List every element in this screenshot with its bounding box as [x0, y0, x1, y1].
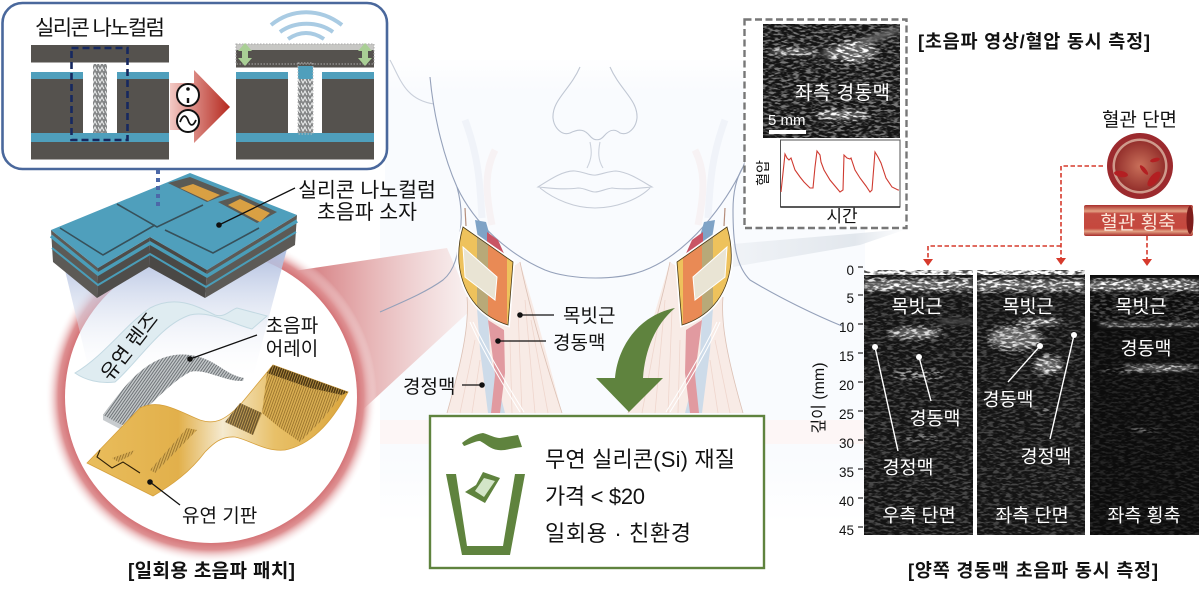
ultrasound image: 좌측 경동맥: [795, 82, 890, 104]
chip: silicon nanocolumn device: [51, 173, 297, 298]
label: flexible substrate: 유연 기판: [182, 505, 257, 527]
ultrasound array: [103, 355, 244, 430]
heading: simultaneous ultrasound and blood pressure: [초음파 영상/혈압 동시 측정]: [918, 31, 1150, 52]
muscle outer edge: [447, 262, 562, 413]
depth axis: 35: [839, 465, 854, 480]
ultrasound panel: left longitudinal: [1090, 275, 1199, 535]
ultrasound panel: left longitudinal: 경동맥: [1120, 338, 1172, 359]
face and neck pale background: [380, 58, 865, 523]
icon: ultrasound waves: [271, 12, 342, 39]
muscle fibers: [460, 300, 548, 413]
feature text: [545, 447, 735, 546]
muscle: [447, 262, 562, 413]
pointer: jugular: 경정맥: [1020, 446, 1072, 467]
panel title: 실리콘 나노컬럼: [35, 17, 165, 40]
jugular vein: [477, 308, 505, 413]
icon: vessel longitudinal tube: [1084, 205, 1194, 236]
label: silicon nanocolumn ultrasound element: [216, 179, 436, 228]
ultrasound panel: right cross-section: 우측 단면: [882, 505, 956, 526]
heading: disposable ultrasound patch: [일회용 초음파 패치]: [128, 560, 295, 582]
projection beam from chip (blue): [63, 245, 288, 377]
feature text: 일회용 · 친환경: [545, 521, 691, 546]
facial outline: [380, 60, 842, 326]
neck label: muscle: 목빗근: [563, 305, 615, 327]
cross-section vibrating state: [236, 43, 374, 160]
ultrasound image: [763, 24, 900, 138]
pointer: carotid: 경동맥: [982, 389, 1034, 410]
pointer: carotid: [982, 343, 1043, 410]
panel: glow circle with patch exploded view: [45, 231, 377, 563]
label: ultrasound array: [187, 315, 318, 362]
depth axis: 0: [846, 263, 854, 278]
ultrasound panel: left longitudinal: 목빗근: [1115, 296, 1167, 317]
icon: hand and disposal bin: [446, 433, 525, 555]
blood pressure chart: 혈압: [755, 160, 771, 186]
arrow: voltage applied: [170, 70, 230, 143]
label: ultrasound array: 초음파: [266, 315, 318, 337]
panel: ultrasound image and blood pressure: [744, 20, 906, 228]
ultrasound panel: left cross-section: 목빗근: [1002, 296, 1054, 317]
neck label: jugular vein: 경정맥: [403, 376, 455, 398]
label: ultrasound array: 어레이: [266, 338, 318, 360]
panel: silicon nanocolumn working principle: [2, 3, 387, 169]
depth axis: 20: [839, 378, 854, 393]
projection beam to neck (red): [287, 248, 473, 415]
lens label: 유연 렌즈: [96, 308, 163, 385]
cross-section rest state: [31, 45, 169, 160]
ultrasound image: 5 mm: [768, 112, 806, 129]
depth axis: 25: [839, 407, 854, 422]
neck label: carotid artery: [495, 332, 605, 354]
feature text: 가격 < $20: [545, 484, 645, 509]
arrows: dashed red connectors: [923, 166, 1152, 266]
ultrasound panel: left cross-section: 좌측 단면: [995, 505, 1069, 526]
pointer: carotid: 경동맥: [909, 408, 961, 429]
icon: vessel longitudinal tube: 혈관 횡축: [1100, 212, 1176, 234]
label: vessel cross-section: 혈관 단면: [1102, 109, 1177, 131]
neck label: muscle: [517, 305, 615, 327]
depth axis: 10: [839, 320, 854, 335]
pointer: jugular: 경정맥: [882, 457, 934, 478]
dashed connector from panel to chip: [156, 170, 160, 207]
depth axis: 15: [839, 349, 854, 364]
label: flexible substrate: [147, 479, 257, 527]
pointer: jugular: [1020, 332, 1077, 467]
neck label: carotid artery: 경동맥: [553, 332, 605, 354]
depth axis: 5: [846, 291, 854, 306]
depth axis: 깊이 (mm): [810, 362, 828, 434]
carotid artery: [488, 320, 505, 413]
ultrasound panel: left longitudinal: 좌측 횡축: [1107, 505, 1181, 526]
icon: vessel cross-section: [1107, 133, 1173, 199]
upper vessel stubs: [465, 208, 506, 258]
flexible substrate: [87, 365, 348, 496]
faint facial vessels: [465, 120, 725, 225]
ultrasound panel: right cross-section: 목빗근: [891, 296, 943, 317]
feature text: 무연 실리콘(Si) 재질: [545, 447, 735, 472]
pointer: jugular: [872, 344, 934, 478]
depth axis: 40: [839, 494, 854, 509]
panel: disposable eco features: [430, 416, 764, 568]
depth axis: 45: [839, 523, 854, 538]
blood pressure chart: 시간: [826, 207, 858, 226]
depth axis: 30: [839, 436, 854, 451]
label: silicon nanocolumn ultrasound element: 초음파 소자: [317, 201, 417, 224]
ultrasound patch: [455, 220, 515, 330]
flexible lens: [75, 302, 267, 383]
neck label: jugular vein: [403, 376, 485, 398]
arrow: green curved down: [596, 308, 675, 412]
ultrasound panel: left cross-section: [977, 270, 1085, 535]
projection beam to dashed box (gray): [733, 229, 907, 267]
pointer: carotid: [909, 354, 961, 429]
blood pressure chart: [755, 140, 900, 226]
ultrasound panel: right cross-section: [864, 270, 973, 535]
label: silicon nanocolumn ultrasound element: 실리콘 나노컬럼: [298, 179, 436, 202]
heading: bilateral carotid simultaneous measurement: [양쪽 경동맥 초음파 동시 측정]: [908, 560, 1158, 581]
right neck anatomy and patch (mirror): [628, 208, 743, 413]
depth axis: [810, 263, 863, 538]
left neck anatomy and patch: [447, 208, 562, 413]
